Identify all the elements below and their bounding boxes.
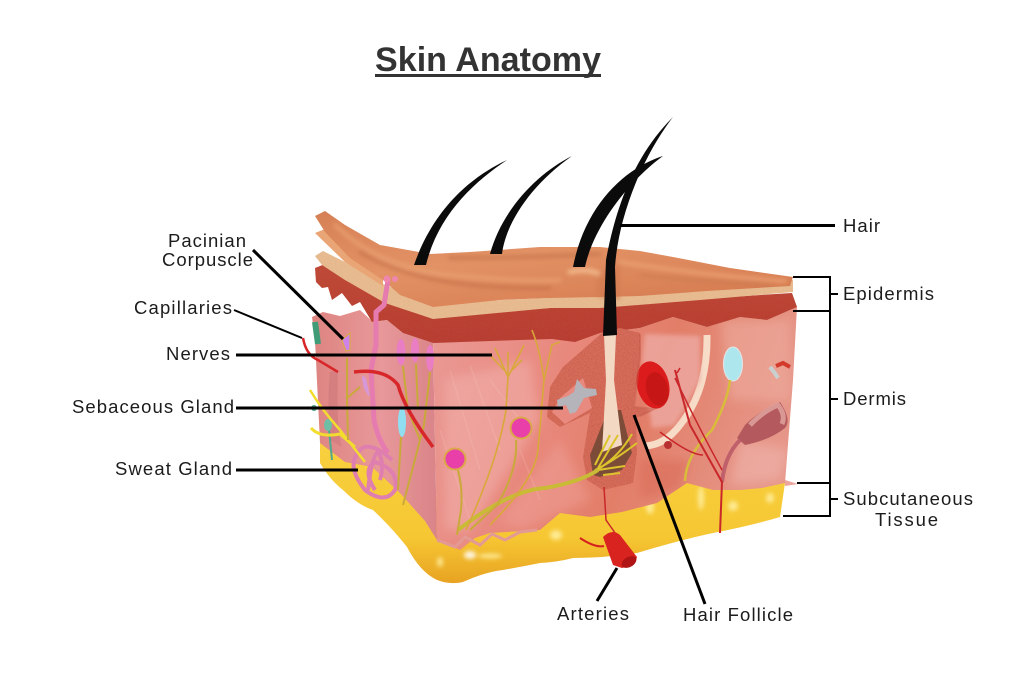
label: Capillaries: Capillaries: [134, 297, 232, 318]
title: Skin Anatomy: [375, 41, 601, 79]
follicle bulb: [590, 410, 632, 477]
dermis front face: [433, 307, 797, 550]
left pink duct: [371, 280, 388, 453]
arrector muscle: [722, 402, 788, 482]
left face fold: [328, 370, 342, 447]
hairs: [414, 117, 673, 336]
label: Sweat Gland: Sweat Gland: [115, 458, 232, 479]
surface shading: [335, 225, 785, 288]
sebaceous gland: [557, 379, 597, 414]
label: Hair Follicle: Hair Follicle: [683, 604, 793, 625]
branching nerve endings: [466, 330, 560, 530]
fat highlights: [437, 486, 774, 567]
capillary red loop: [303, 338, 338, 372]
tan granular layer: [315, 251, 793, 319]
blue corpuscle left: [398, 407, 406, 490]
pore: [384, 276, 398, 282]
label: Pacinian Corpuscle: Pacinian: [168, 230, 246, 251]
bracket: Dermis: [797, 311, 906, 483]
dermis soft shading: [440, 320, 790, 530]
sebaceous gland interior: [552, 378, 592, 424]
right dermis tip: [785, 480, 798, 486]
notch in surface around main hair: [597, 265, 620, 300]
hair root: [602, 335, 622, 452]
left green glands: [311, 322, 332, 460]
sweat gland coil: [354, 447, 396, 498]
left yellow nerves: [310, 358, 365, 462]
back flap: [315, 229, 383, 286]
red upper layer: [315, 262, 797, 343]
pale capsule: [362, 375, 370, 397]
pale dermal pocket: [642, 334, 700, 428]
dermis left face: [312, 310, 437, 540]
artery: [580, 532, 638, 570]
nerve endings with pink capsules: [396, 338, 434, 505]
bracket: Subcutaneous Tissue: [783, 483, 973, 530]
bracket: Subcutaneous Tissue: Subcutaneous: [843, 488, 973, 509]
label: Arteries: [557, 568, 629, 624]
follicle nerve: [595, 434, 637, 475]
hair 3: [573, 156, 663, 267]
bracket: Epidermis: Epidermis: [843, 283, 934, 304]
label: Pacinian Corpuscle: [162, 230, 343, 339]
label: Hair Follicle: [634, 415, 793, 625]
hair 4 main: [603, 117, 673, 336]
bracket: Dermis: Dermis: [843, 388, 906, 409]
small vein: [770, 363, 790, 378]
bracket: Subcutaneous Tissue: Tissue: [875, 509, 938, 530]
cream band: [645, 335, 707, 446]
left artery: [354, 371, 433, 447]
label: Pacinian Corpuscle: Corpuscle: [162, 249, 253, 270]
skin cross-section illustration: [303, 117, 798, 583]
blood vessel: [632, 358, 674, 412]
label: Capillaries: [134, 297, 302, 338]
top skin surface: [315, 211, 793, 307]
bracket: Epidermis: [793, 277, 934, 311]
label: Nerves: Nerves: [166, 343, 230, 364]
magenta corpuscle left: [444, 448, 466, 535]
hair 2: [490, 156, 572, 254]
red capillaries right: [604, 368, 722, 540]
hair follicle sheath: [547, 328, 653, 490]
hair 1: [414, 160, 507, 265]
small pacinian: [342, 333, 350, 351]
subcutaneous fat layer: [320, 430, 785, 583]
right pacinian corpuscle: [685, 347, 742, 481]
label: Hair: Hair: [843, 215, 880, 236]
epidermis texture over follicle: [634, 334, 654, 416]
magenta corpuscle right: [470, 418, 532, 530]
label: Sebaceous Gland: Sebaceous Gland: [72, 396, 234, 417]
label: Arteries: Arteries: [557, 603, 629, 624]
jagged lower dermis edge: [437, 530, 537, 547]
red vessel dot: [664, 441, 672, 449]
main nerve trunk: [458, 470, 598, 530]
